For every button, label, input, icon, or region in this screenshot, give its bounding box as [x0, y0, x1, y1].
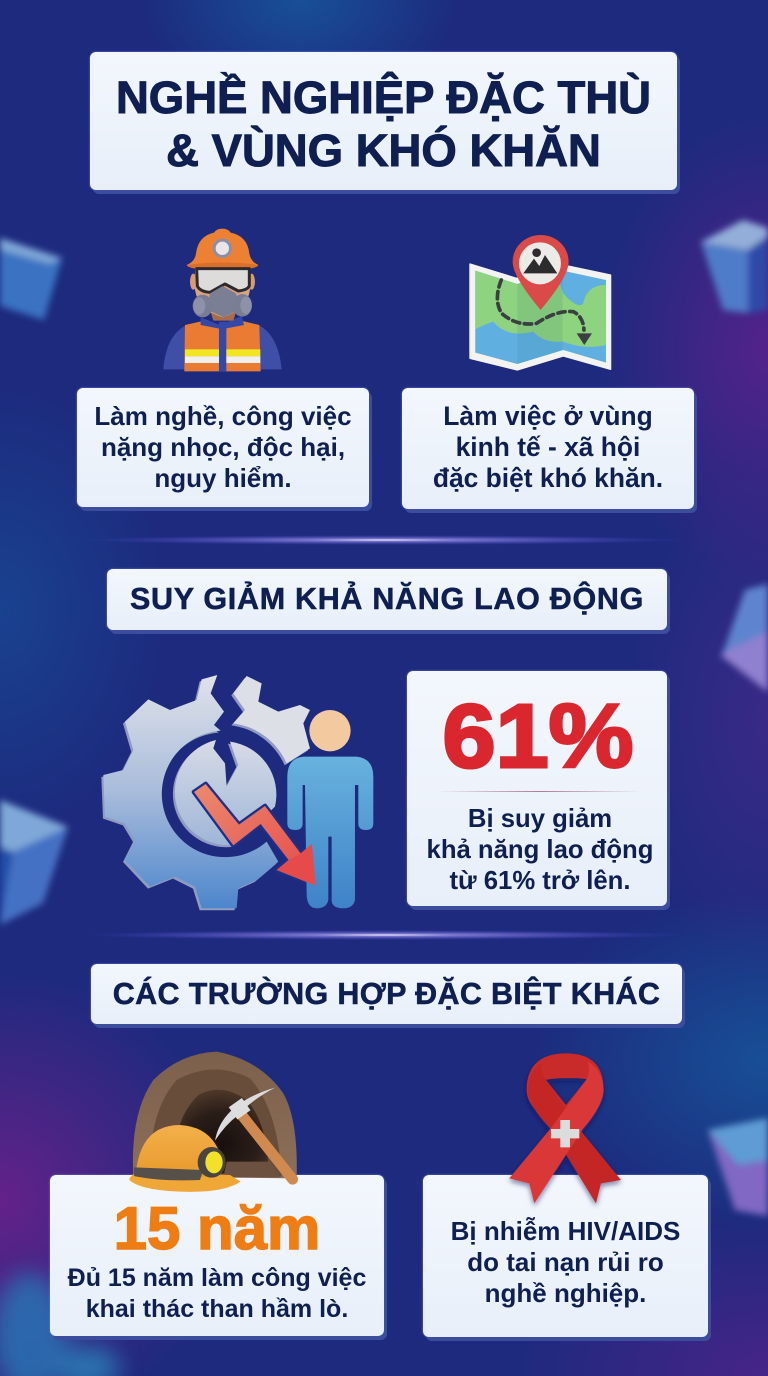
text: description: từ 61% trở lên. — [449, 867, 631, 895]
card: HIV/AIDS — [423, 1175, 708, 1337]
thin divider — [437, 791, 642, 792]
card: heavy hazardous work: Làm nghề, công việc — [94, 401, 352, 431]
card: HIV/AIDS: Bị nhiễm HIV/AIDS — [451, 1216, 680, 1246]
card: heavy hazardous work — [77, 388, 369, 507]
card: difficult regions: đặc biệt khó khăn. — [433, 463, 663, 493]
gear left piece — [103, 675, 278, 908]
arrow falling — [194, 784, 316, 886]
person head — [309, 710, 351, 751]
heading: other special cases: CÁC TRƯỜNG HỢP ĐẶC BIỆT KHÁC — [113, 977, 660, 1011]
text: coal mining description: Đủ 15 năm làm công việc — [68, 1264, 366, 1292]
title panel: & VÙNG KHÓ KHĂN — [166, 125, 601, 176]
number: 61%: 61% — [443, 687, 633, 787]
title panel — [90, 52, 677, 190]
card: 61 percent — [407, 671, 667, 906]
arrow head over person — [277, 844, 316, 886]
heading: other special cases — [91, 964, 682, 1024]
text: coal mining description — [68, 1264, 366, 1323]
heading: reduced working capacity: SUY GIẢM KHẢ NĂNG LAO ĐỘNG — [130, 582, 644, 616]
card: 15 years — [50, 1175, 384, 1336]
card: heavy hazardous work: nặng nhọc, độc hại, — [101, 432, 345, 462]
card: difficult regions — [402, 388, 694, 509]
card: heavy hazardous work: nguy hiểm. — [154, 463, 292, 493]
text: description: khả năng lao động — [427, 836, 653, 864]
icon: red ribbon with cross — [509, 1053, 621, 1203]
icon: map with location pin — [470, 235, 611, 370]
number: 15 năm: 15 năm — [114, 1195, 320, 1262]
icon: mine tunnel with helmet and pickaxe — [129, 1052, 297, 1192]
gear hub — [175, 740, 276, 845]
gear right piece — [233, 676, 310, 763]
card: difficult regions: kinh tế - xã hội — [456, 432, 640, 462]
text: description — [427, 805, 653, 895]
card: HIV/AIDS: nghề nghiệp. — [485, 1278, 646, 1308]
card: difficult regions: Làm việc ở vùng — [443, 401, 653, 431]
card: HIV/AIDS: do tai nạn rủi ro — [467, 1247, 664, 1277]
icon: miner with gas mask — [163, 229, 282, 372]
person body — [287, 757, 373, 908]
heading: reduced working capacity — [107, 569, 667, 630]
title panel: NGHỀ NGHIỆP ĐẶC THÙ — [116, 72, 651, 123]
icon: broken gear with falling arrow and person — [103, 675, 373, 908]
text: description: Bị suy giảm — [468, 805, 612, 833]
text: coal mining description: khai thác than hầm lò. — [86, 1295, 348, 1323]
